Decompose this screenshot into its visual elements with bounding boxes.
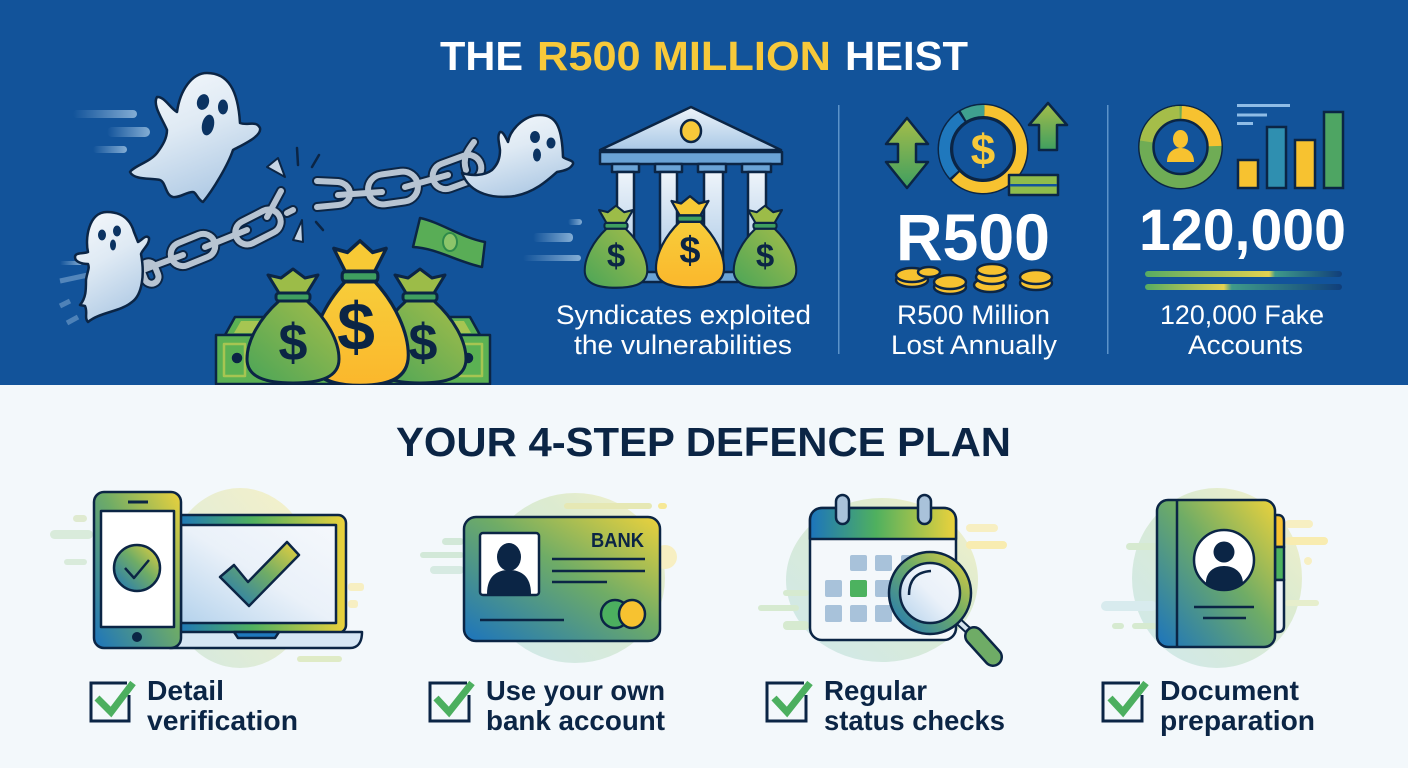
label: 120,000 fake accounts: 120,000 Fake xyxy=(1160,300,1324,330)
motion lines: ghosts xyxy=(60,110,150,323)
label: R500 million lost annually: R500 Million xyxy=(897,300,1050,330)
checklist: regular status checks xyxy=(767,675,1005,736)
label: 120,000 fake accounts: Accounts xyxy=(1188,330,1303,360)
icon: hero money bags: $ xyxy=(279,314,308,372)
checklist: regular status checks: status checks xyxy=(824,705,1005,736)
heading: YOUR 4-STEP DEFENCE PLAN xyxy=(396,419,1011,465)
panel: defence plan xyxy=(0,385,1408,768)
number: 120,000: 120,000 xyxy=(1139,198,1346,263)
checklist: regular status checks: Regular xyxy=(824,675,927,706)
icon: hero money bags xyxy=(247,241,466,386)
step 3: regular status checks xyxy=(758,495,1007,736)
number: R500: R500 xyxy=(896,200,1050,274)
icon: money flow: $ xyxy=(971,126,995,175)
icon: bank with money bags: $ xyxy=(679,230,701,272)
step 4: document preparation xyxy=(1101,488,1328,736)
progress bars xyxy=(1145,271,1342,290)
icon: bank with money bags xyxy=(585,107,796,288)
icon: hero money bags: $ xyxy=(409,314,438,372)
label: R500 million lost annually: Lost Annually xyxy=(891,330,1058,360)
title: R500 MILLION xyxy=(537,33,831,79)
icon: bar chart xyxy=(1237,106,1343,188)
icon: phone and laptop xyxy=(50,488,364,668)
icon: right ghost xyxy=(462,115,573,197)
title: HEIST xyxy=(845,33,968,79)
icon: left ghost xyxy=(75,212,149,322)
checklist: detail verification xyxy=(91,675,298,736)
icon: user donut chart xyxy=(1138,104,1223,190)
title xyxy=(440,33,968,79)
icon: bank with money bags: $ xyxy=(756,237,774,274)
icon: bank card xyxy=(420,493,677,663)
checklist: use your own bank account xyxy=(430,675,665,736)
icon: money flow xyxy=(886,103,1067,195)
icon: cash stacks xyxy=(216,317,490,384)
checklist: document preparation xyxy=(1103,675,1315,736)
label: R500 million lost annually xyxy=(891,300,1058,360)
step 1: detail verification xyxy=(50,488,364,736)
step 2: use your own bank account xyxy=(420,493,677,736)
label: 120,000 fake accounts xyxy=(1160,300,1324,360)
text: syndicates: the vulnerabilities xyxy=(574,330,792,360)
checklist: detail verification: verification xyxy=(147,705,298,736)
checklist: use your own bank account: bank account xyxy=(486,705,665,736)
icon: coins xyxy=(896,264,1052,294)
icon: bank with money bags: $ xyxy=(607,237,625,274)
title: THE xyxy=(440,33,523,79)
icon: hero money bags: $ xyxy=(337,289,375,365)
text: syndicates xyxy=(556,300,811,360)
icon: bank card: BANK xyxy=(591,530,645,552)
checklist: document preparation: preparation xyxy=(1160,705,1315,736)
icon: floating banknote xyxy=(413,218,485,267)
stat: R500 million xyxy=(886,103,1067,360)
icon: large ghost xyxy=(130,73,260,202)
stat: 120,000 fake accounts xyxy=(1138,104,1346,360)
broken chain xyxy=(139,142,485,286)
icon: calendar and magnifier xyxy=(758,495,1007,662)
icon: passport notebook xyxy=(1101,488,1328,668)
checklist: use your own bank account: Use your own xyxy=(486,675,665,706)
text: syndicates: Syndicates exploited xyxy=(556,300,811,330)
checklist: detail verification: Detail xyxy=(147,675,224,706)
checklist: document preparation: Document xyxy=(1160,675,1299,706)
panel: the heist xyxy=(0,0,1408,386)
motion lines: bank xyxy=(523,219,582,261)
